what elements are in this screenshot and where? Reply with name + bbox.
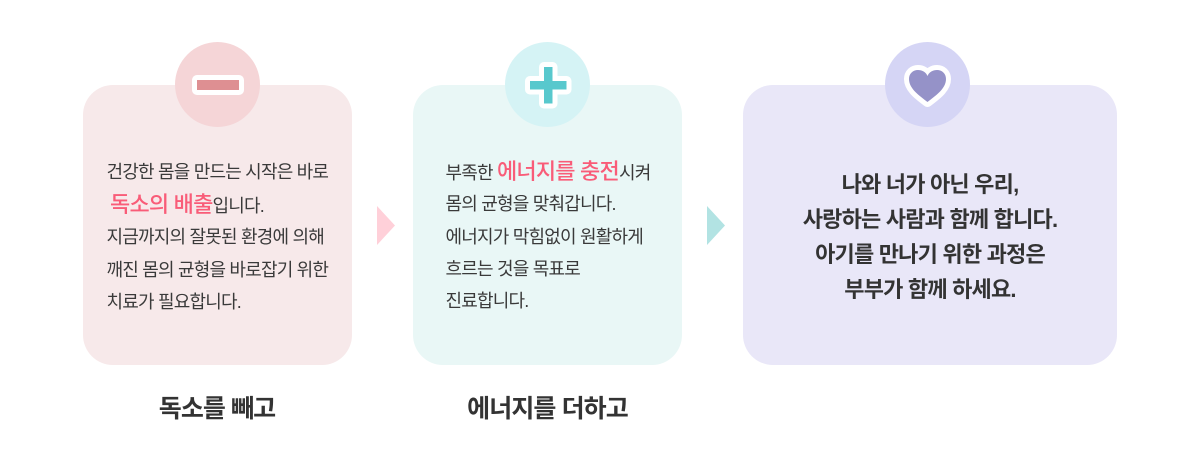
text block: toxin removal description: 치료가 필요합니다. — [106, 292, 241, 312]
text block: toxin removal description: 지금까지의 잘못된 환경에 의해 — [106, 227, 324, 247]
icon: heart circle — [885, 42, 970, 127]
caption: toxin removal: 독소를 빼고 — [159, 395, 275, 423]
text block: toxin removal description: 독소의 배출입니다. — [110, 192, 264, 216]
icon: plus circle — [505, 42, 590, 127]
text block: together message: 아기를 만나기 위한 과정은 — [815, 242, 1045, 267]
text block: toxin removal description — [106, 162, 328, 312]
text block: together message: 사랑하는 사람과 함께 합니다. — [803, 207, 1057, 232]
text block: energy description: 몸의 균형을 맞춰갑니다. — [446, 194, 616, 214]
text block: together message: 나와 너가 아닌 우리, — [842, 172, 1018, 197]
text block: together message: 부부가 함께 하세요. — [844, 276, 1016, 302]
text block: toxin removal description: 깨진 몸의 균형을 바로잡기 위한 — [106, 260, 328, 280]
arrow: teal — [707, 206, 725, 245]
text block: energy description: 진료합니다. — [446, 291, 529, 311]
panel: toxin removal — [83, 85, 352, 365]
caption: add energy: 에너지를 더하고 — [467, 395, 628, 423]
text block: energy description: 에너지가 막힘없이 원활하게 — [446, 227, 643, 247]
icon: minus circle — [175, 42, 260, 127]
arrow: pink — [377, 206, 395, 245]
text block: energy description — [446, 159, 650, 311]
text block: toxin removal description: 건강한 몸을 만드는 시작은 바로 — [106, 162, 328, 182]
panel: energy supplement — [413, 85, 682, 365]
text block: energy description: 흐르는 것을 목표로 — [446, 259, 580, 279]
text block: together message — [803, 172, 1057, 302]
text block: energy description: 부족한 에너지를 충전시켜 — [446, 159, 650, 184]
panel: together — [743, 85, 1116, 365]
